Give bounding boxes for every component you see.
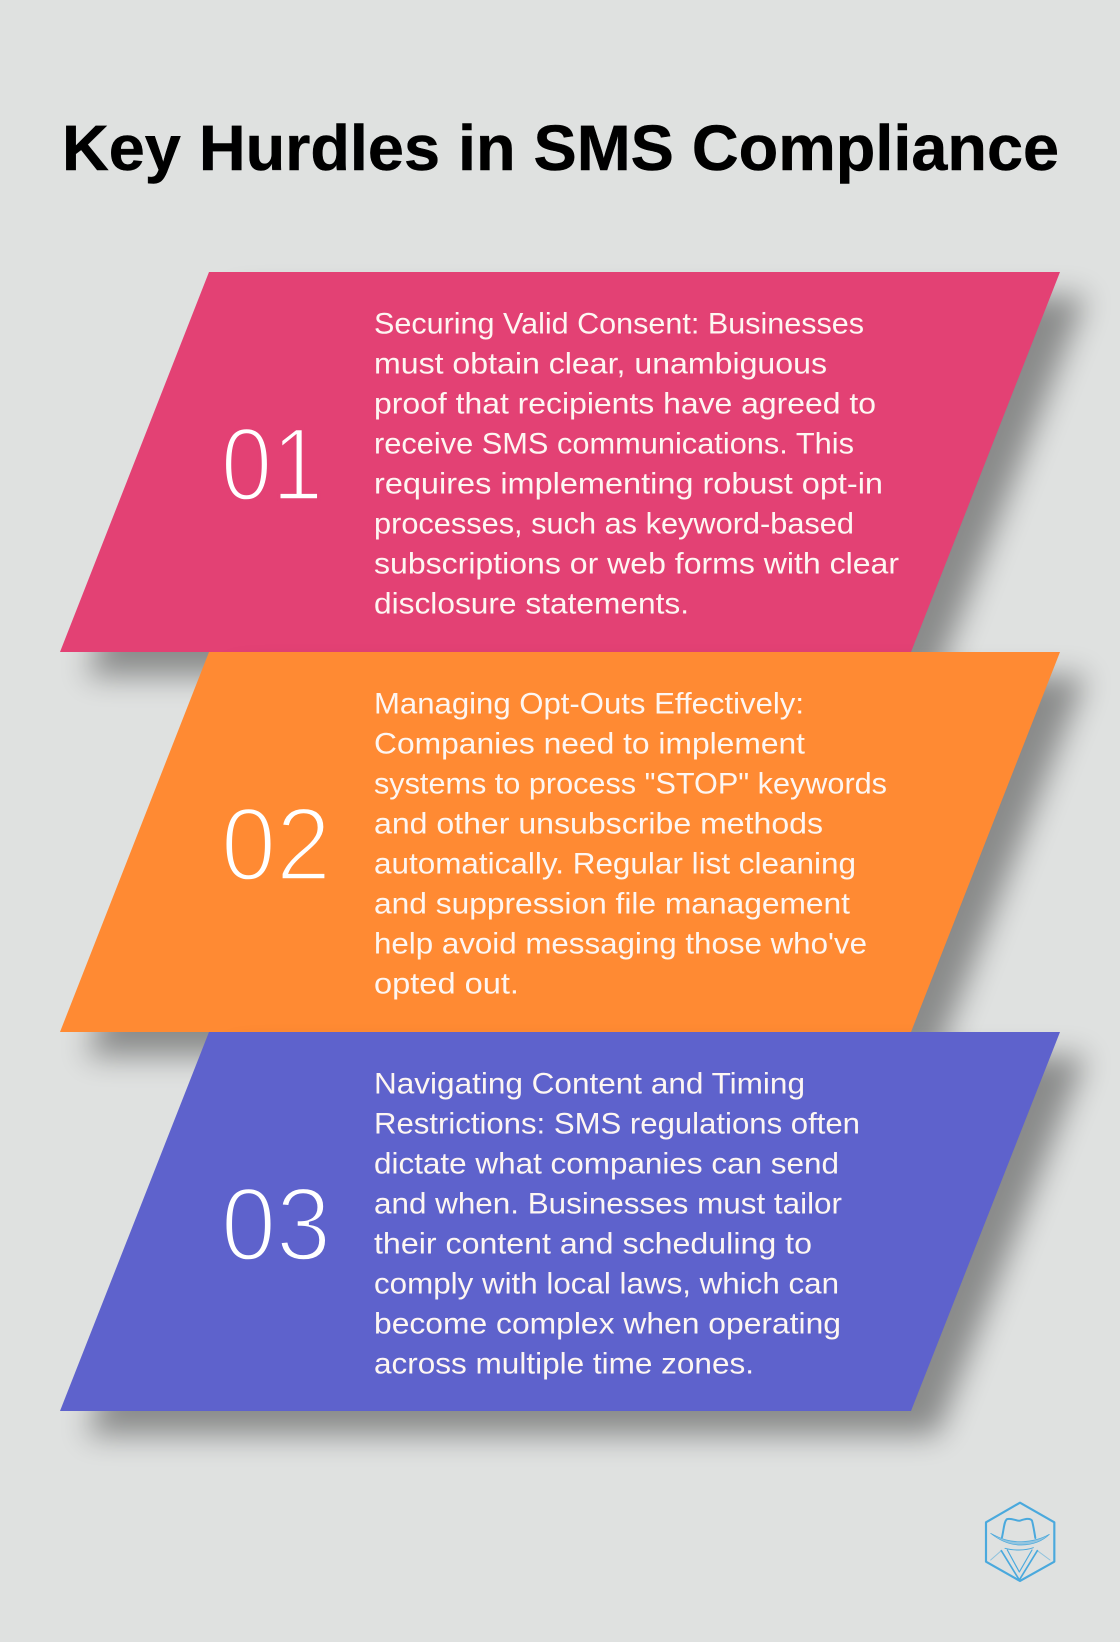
text: securing valid consent: processes, such as keyword-based: [374, 508, 854, 540]
text: managing opt-outs: and other unsubscribe methods: [374, 808, 823, 840]
text: managing opt-outs: and suppression file management: [374, 888, 850, 920]
title: Key Hurdles in SMS Compliance: [62, 112, 1059, 184]
text: securing valid consent: proof that recipients have agreed to: [374, 388, 876, 420]
text: securing valid consent: [374, 308, 899, 620]
text: managing opt-outs: automatically. Regular list cleaning: [374, 848, 856, 880]
panel: navigating content and timing restrictions: [60, 1032, 1086, 1435]
text: navigating content and timing restrictions: and when. Businesses must tailor: [374, 1188, 842, 1220]
number 02: 02: [221, 787, 331, 903]
text: managing opt-outs: Managing Opt-Outs Effectively:: [374, 688, 804, 720]
number 01: 01: [221, 407, 323, 523]
text: managing opt-outs: Companies need to implement: [374, 728, 805, 760]
text: navigating content and timing restrictions: [374, 1068, 860, 1380]
text: managing opt-outs: opted out.: [374, 968, 519, 1000]
text: securing valid consent: subscriptions or web forms with clear: [374, 548, 899, 580]
text: securing valid consent: disclosure statements.: [374, 588, 689, 620]
panel: managing opt-outs: [60, 652, 1086, 1056]
text: navigating content and timing restrictions: Restrictions: SMS regulations often: [374, 1108, 860, 1140]
text: securing valid consent: Securing Valid Consent: Businesses: [374, 308, 864, 340]
text: securing valid consent: receive SMS communications. This: [374, 428, 854, 460]
text: navigating content and timing restrictions: dictate what companies can send: [374, 1148, 839, 1180]
number 03: 03: [221, 1167, 331, 1283]
text: navigating content and timing restrictions: comply with local laws, which can: [374, 1268, 839, 1300]
icon: logo hexagon with spy hat: [986, 1503, 1054, 1581]
panel: securing valid consent: [60, 272, 1086, 676]
text: navigating content and timing restrictions: across multiple time zones.: [374, 1348, 754, 1380]
text: securing valid consent: requires implementing robust opt-in: [374, 468, 883, 500]
text: navigating content and timing restrictions: their content and scheduling to: [374, 1228, 812, 1260]
text: securing valid consent: must obtain clear, unambiguous: [374, 348, 827, 380]
text: navigating content and timing restrictions: Navigating Content and Timing: [374, 1068, 805, 1100]
text: managing opt-outs: [374, 688, 887, 1000]
text: managing opt-outs: help avoid messaging those who've: [374, 928, 867, 960]
text: managing opt-outs: systems to process "STOP" keywords: [374, 768, 887, 800]
text: navigating content and timing restrictions: become complex when operating: [374, 1308, 841, 1340]
